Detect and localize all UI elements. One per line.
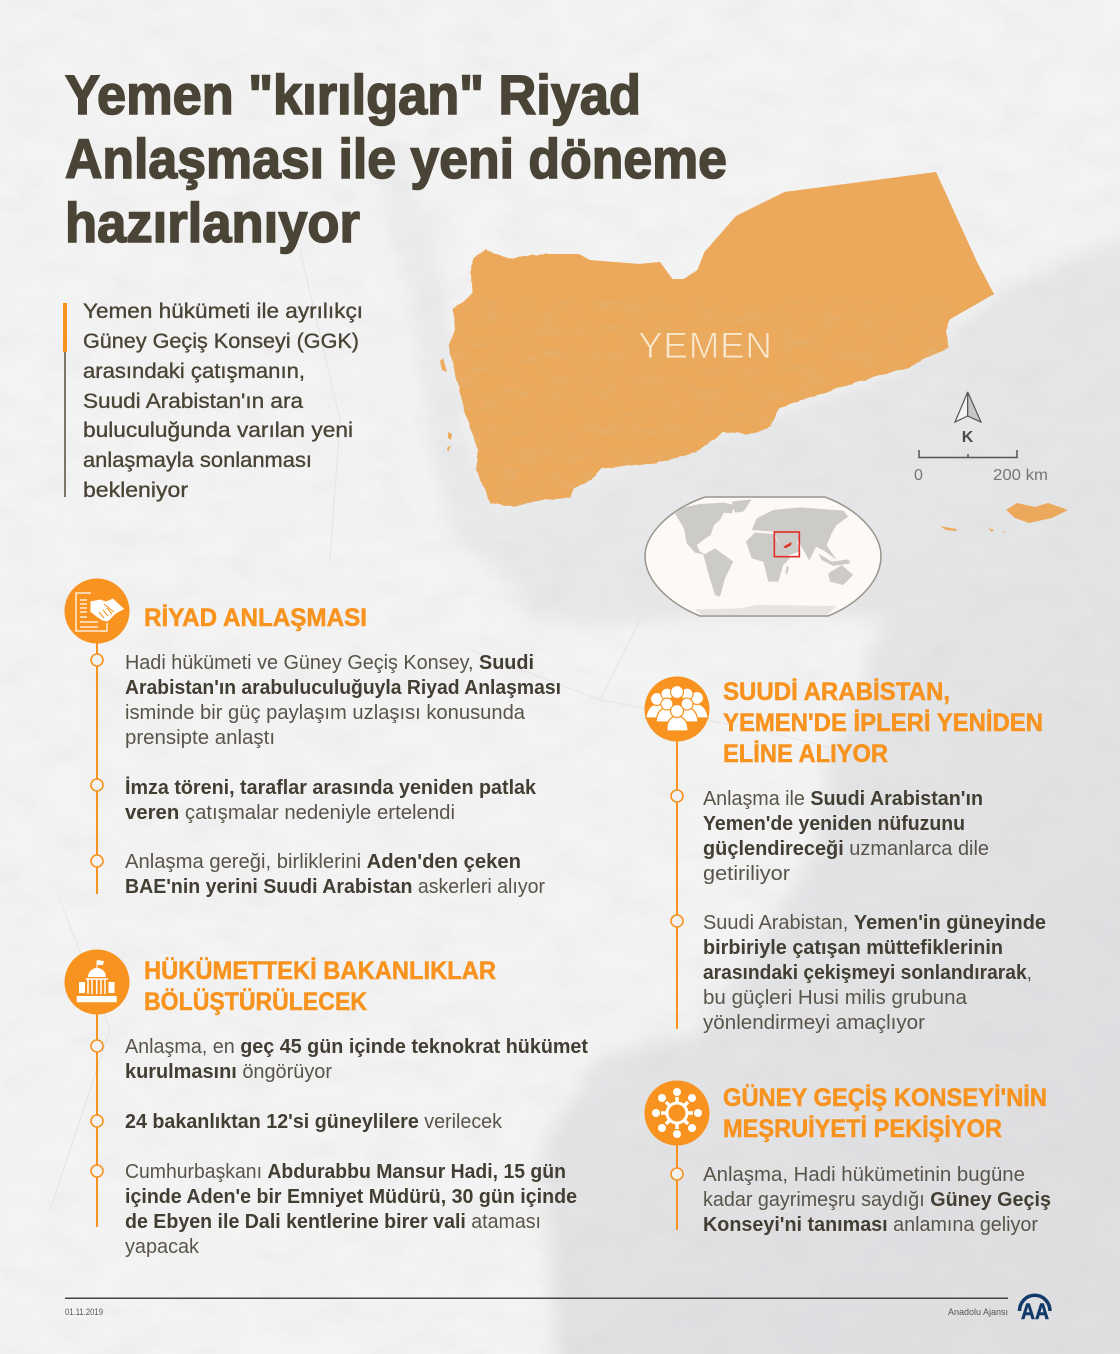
icon: network of people [644, 1080, 710, 1146]
text block: Anlaşma, Hadi hükümetinin bugüne [703, 1164, 1025, 1186]
intro text block: buluculuğunda varılan yeni [83, 419, 353, 442]
title: hazırlanıyor [65, 191, 360, 254]
text block: BAE'nin yerini Suudi Arabistan askerleri alıyor [125, 876, 545, 898]
bullets [671, 790, 683, 927]
text block [703, 1164, 1051, 1236]
heading [723, 678, 1043, 768]
text block: Anlaşma ile Suudi Arabistan'ın [703, 788, 983, 810]
heading: SUUDİ ARABİSTAN, [723, 678, 950, 706]
text block: veren çatışmalar nedeniyle ertelendi [125, 802, 455, 824]
text block: de Ebyen ile Dali kentlerine birer vali ataması [125, 1211, 541, 1233]
intro text block: Güney Geçiş Konseyi (GGK) [83, 330, 359, 353]
text block: prensipte anlaştı [125, 727, 275, 749]
heading: ELİNE ALIYOR [723, 740, 888, 768]
text block: Anlaşma gereği, birliklerini Aden'den çeken [125, 851, 521, 873]
intro text block: anlaşmayla sonlanması [83, 449, 312, 472]
title [65, 63, 727, 254]
text block [703, 788, 1046, 1034]
heading: HÜKÜMETTEKİ BAKANLIKLAR [144, 956, 496, 985]
logo: Anadolu Agency: AA [1021, 1299, 1049, 1324]
icon: handshake and document [64, 578, 130, 644]
bullets [91, 1040, 103, 1177]
intro text block: Yemen hükümeti ile ayrılıkçı [83, 300, 363, 323]
text block: Cumhurbaşkanı Abdurabbu Mansur Hadi, 15 gün [125, 1161, 566, 1183]
heading [144, 956, 496, 1016]
icon: government building [64, 950, 130, 1014]
icon: crowd of people [644, 676, 710, 742]
north arrow and scale: 200 km [993, 467, 1048, 484]
text block: yönlendirmeyi amaçlıyor [703, 1012, 925, 1034]
heading: GÜNEY GEÇİŞ KONSEYİ'NİN [723, 1083, 1047, 1112]
map: Yemen [440, 172, 1068, 533]
intro text block: bekleniyor [83, 479, 188, 502]
heading: MEŞRUİYETİ PEKİŞİYOR [723, 1115, 1002, 1143]
bullets [91, 654, 103, 867]
text block: kadar gayrimeşru saydığı Güney Geçiş [703, 1189, 1051, 1211]
intro text block: arasındaki çatışmanın, [83, 360, 305, 383]
title: Anlaşması ile yeni döneme [65, 127, 727, 190]
footer [65, 1295, 1050, 1324]
text block: güçlendireceği uzmanlarca dile [703, 838, 989, 860]
text block [125, 652, 561, 898]
title: Yemen "kırılgan" Riyad [65, 63, 641, 126]
panel: Southern Transitional Council [644, 1080, 1051, 1236]
text block: Konseyi'ni tanıması anlamına geliyor [703, 1214, 1038, 1236]
text block: içinde Aden'e bir Emniyet Müdürü, 30 gün içinde [125, 1186, 577, 1208]
text block: bu güçleri Husi milis grubuna [703, 987, 968, 1009]
intro text block [63, 300, 363, 502]
text block: İmza töreni, taraflar arasında yeniden patlak [125, 776, 537, 799]
heading: BÖLÜŞTÜRÜLECEK [144, 987, 367, 1016]
panel: Saudi Arabia [644, 676, 1046, 1034]
panel: ministries [64, 950, 588, 1258]
text block: Yemen'de yeniden nüfuzunu [703, 813, 965, 835]
heading: RİYAD ANLAŞMASI [144, 604, 367, 632]
heading: YEMEN'DE İPLERİ YENİDEN [723, 709, 1043, 737]
north arrow and scale [914, 392, 1048, 484]
text block: Hadi hükümeti ve Güney Geçiş Konsey, Suudi [125, 652, 534, 674]
bullet [671, 1168, 683, 1180]
north arrow and scale: 0 [914, 467, 923, 484]
text block: Arabistan'ın arabuluculuğuyla Riyad Anlaşması [125, 677, 561, 699]
text block: birbiriyle çatışan müttefiklerinin [703, 937, 1003, 959]
text block: getiriliyor [703, 863, 790, 885]
text block: Anlaşma, en geç 45 gün içinde teknokrat hükümet [125, 1036, 588, 1058]
heading [723, 1083, 1047, 1143]
intro text block: Suudi Arabistan'ın ara [83, 390, 303, 413]
text block: isminde bir güç paylaşım uzlaşısı konusunda [125, 702, 526, 724]
text block: Suudi Arabistan, Yemen'in güneyinde [703, 912, 1046, 934]
text block: 24 bakanlıktan 12'si güneylilere verilecek [125, 1111, 503, 1133]
text block [125, 1036, 588, 1258]
locator world map [645, 497, 881, 616]
country label: YEMEN [638, 325, 772, 366]
text block: kurulmasını öngörüyor [125, 1061, 332, 1083]
north arrow and scale: K [962, 429, 974, 446]
panel: Riyad agreement [64, 578, 561, 898]
text block: yapacak [125, 1236, 200, 1258]
footer: 01.11.2019 [65, 1307, 103, 1317]
footer: Anadolu Ajansı [948, 1307, 1008, 1317]
text block: arasındaki çekişmeyi sonlandırarak, [703, 962, 1032, 984]
